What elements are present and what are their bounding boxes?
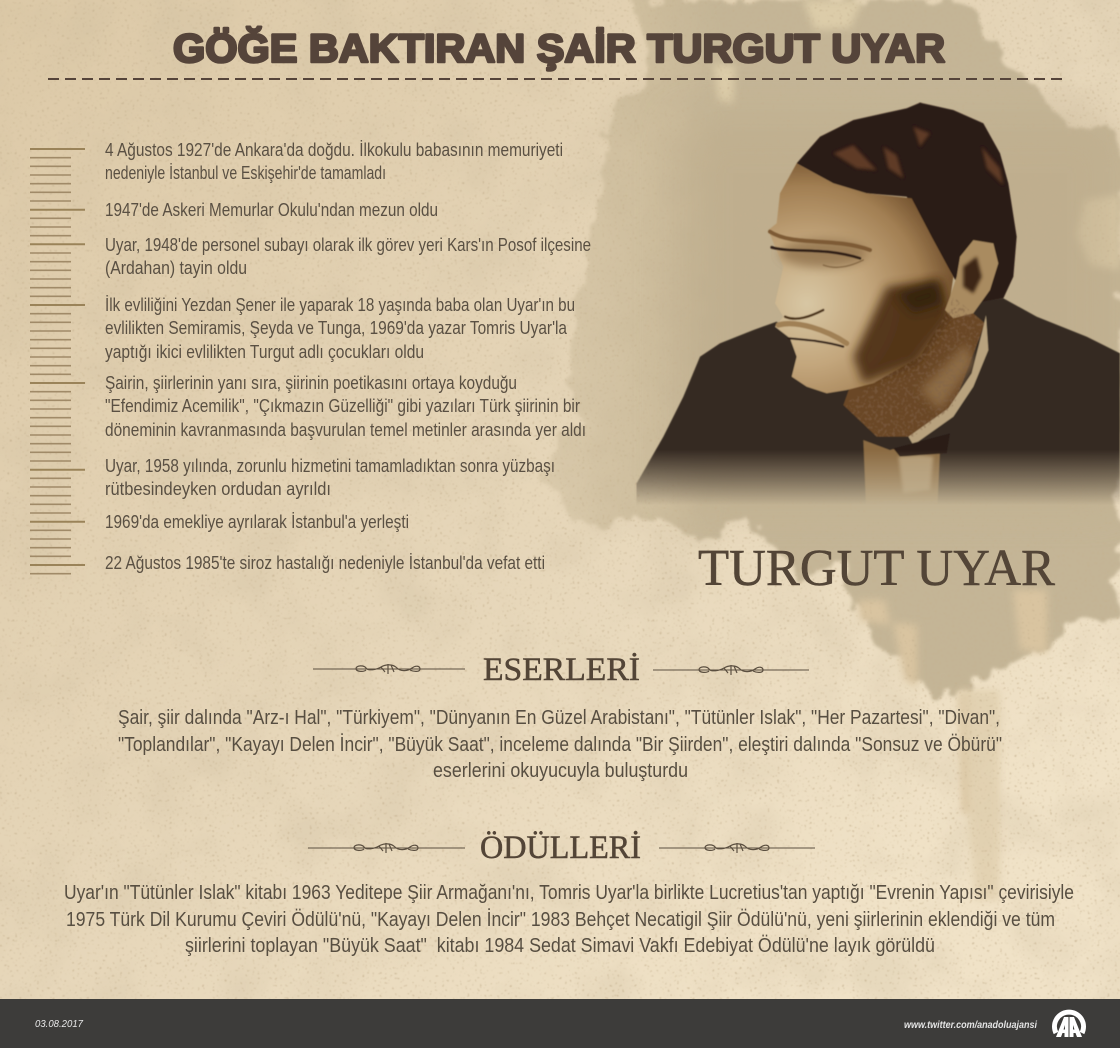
timeline ruler <box>30 149 85 574</box>
biography timeline text: İlk evliliğini Yezdan Şener ile yaparak 18 yaşında baba olan Uyar'ın bu <box>105 295 575 315</box>
footer date: 03.08.2017 <box>35 1019 83 1030</box>
biography timeline text: döneminin kavranmasında başvurulan temel metinler arasında yer aldı <box>105 420 586 440</box>
biography timeline text: Şairin, şiirlerinin yanı sıra, şiirinin poetikasını ortaya koyduğu <box>105 373 517 393</box>
biography timeline text: 1969'da emekliye ayrılarak İstanbul'a yerleşti <box>105 512 409 532</box>
biography timeline text: rütbesindeyken ordudan ayrıldı <box>105 479 331 499</box>
heading ornament: Eserleri left <box>313 664 465 674</box>
biography timeline text: evlilikten Semiramis, Şeyda ve Tunga, 1969'da yazar Tomris Uyar'la <box>105 318 568 338</box>
works paragraph: "Toplandılar", "Kayayı Delen İncir", "Büyük Saat", inceleme dalında "Bir Şiirden", eleştiri dalında "Sonsuz ve Öbürü" <box>118 733 1002 756</box>
icon: Anadolu Agency logo <box>1054 1012 1084 1037</box>
cheek shadow <box>853 280 950 383</box>
shirt front highlight <box>898 455 933 493</box>
works paragraph: eserlerini okuyucuyla buluşturdu <box>433 760 688 782</box>
neck mottling <box>850 300 984 437</box>
hair <box>797 103 1017 303</box>
works paragraph: Şair, şiir dalında "Arz-ı Hal", "Türkiyem", "Dünyanın En Güzel Arabistanı", "Tütünler Islak", "Her Pazartesi", "Divan", <box>118 707 1000 729</box>
face <box>768 163 953 393</box>
works paragraph <box>118 707 1002 782</box>
heading ornament: Ödülleri right <box>659 843 815 853</box>
title: GÖĞE BAKTIRAN ŞAİR TURGUT UYAR <box>173 25 945 71</box>
dashed title rule <box>48 78 1068 80</box>
cheek dark patch <box>897 280 943 313</box>
jacket <box>637 298 1120 520</box>
hair highlights <box>833 127 1003 185</box>
portrait: Turgut Uyar <box>637 103 1120 520</box>
brow, eye, nose, mustache and mouth <box>770 232 870 347</box>
biography timeline text: 22 Ağustos 1985'te siroz hastalığı nedeniyle İstanbul'da vefat etti <box>105 553 545 573</box>
neck <box>843 313 984 438</box>
biography timeline text: 1947'de Askeri Memurlar Okulu'ndan mezun oldu <box>105 200 438 220</box>
ear inner <box>963 257 982 293</box>
neck highlight <box>920 343 973 410</box>
biography timeline text <box>105 140 591 573</box>
heading: Eserleri: ESERLERİ <box>483 652 640 688</box>
footer bar <box>0 999 1120 1048</box>
biography timeline text: Uyar, 1948'de personel subayı olarak ilk görev yeri Kars'ın Posof ilçesine <box>105 235 591 255</box>
shirt <box>862 440 940 500</box>
shirt collar <box>908 315 988 445</box>
heading ornament: Eserleri right <box>653 665 809 675</box>
portrait caption: TURGUT UYAR <box>698 540 1055 597</box>
eye socket shade <box>780 239 867 267</box>
heading: Ödülleri: ÖDÜLLERİ <box>480 830 641 866</box>
awards paragraph <box>64 882 1074 957</box>
biography timeline text: nedeniyle İstanbul ve Eskişehir'de tamamladı <box>105 163 386 183</box>
awards paragraph: şiirlerini toplayan "Büyük Saat" kitabı 1984 Sedat Simavi Vakfı Edebiyat Ödülü'ne layık görüldü <box>185 935 935 957</box>
biography timeline text: (Ardahan) tayin oldu <box>105 258 247 278</box>
biography timeline text: Uyar, 1958 yılında, zorunlu hizmetini tamamladıktan sonra yüzbaşı <box>105 456 555 476</box>
ear <box>945 240 998 318</box>
biography timeline text: "Efendimiz Acemilik", "Çıkmazın Güzelliği" gibi yazıları Türk şiirinin bir <box>105 396 580 416</box>
biography timeline text: 4 Ağustos 1927'de Ankara'da doğdu. İlkokulu babasının memuriyeti <box>105 140 563 160</box>
biography timeline text: yaptığı ikici evlilikten Turgut adlı çocukları oldu <box>105 342 424 362</box>
footer twitter address: www.twitter.com/anadoluajansi <box>904 1020 1037 1031</box>
heading ornament: Ödülleri left <box>308 843 465 853</box>
tie <box>893 433 950 457</box>
